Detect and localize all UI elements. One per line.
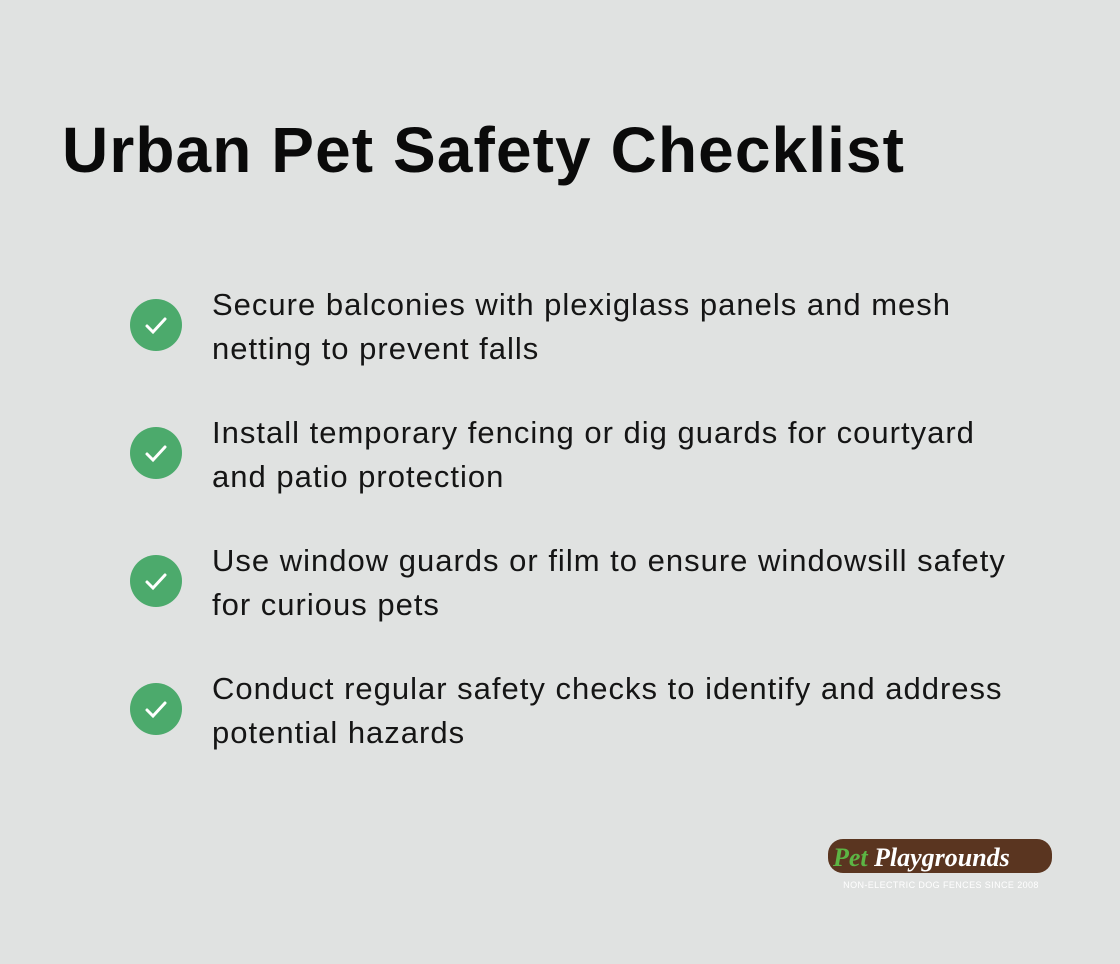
text 2: Install temporary fencing or dig guards for courtyard (212, 415, 975, 450)
icon: check (130, 299, 182, 351)
text 1 (212, 287, 951, 366)
checklist item 4 (130, 671, 1003, 750)
text 2: and patio protection (212, 459, 504, 494)
text 4: potential hazards (212, 715, 465, 750)
text 3: Use window guards or film to ensure windowsill safety (212, 543, 1006, 578)
text 4: Conduct regular safety checks to identify and address (212, 671, 1003, 706)
text 3 (212, 543, 1006, 622)
logo: Playgrounds (873, 843, 1010, 872)
icon: check (130, 427, 182, 479)
logo: NON-ELECTRIC DOG FENCES SINCE 2008 (843, 880, 1039, 890)
title: Urban Pet Safety Checklist (62, 114, 905, 186)
checklist item 3 (130, 543, 1006, 622)
text 1: Secure balconies with plexiglass panels and mesh (212, 287, 951, 322)
text 2 (212, 415, 975, 494)
icon: check (130, 683, 182, 735)
text 3: for curious pets (212, 587, 440, 622)
checklist item 1 (130, 287, 951, 366)
icon: check (130, 555, 182, 607)
logo (828, 839, 1052, 890)
logo: Pet (832, 843, 868, 872)
checklist item 2 (130, 415, 975, 494)
text 4 (212, 671, 1003, 750)
text 1: netting to prevent falls (212, 331, 539, 366)
